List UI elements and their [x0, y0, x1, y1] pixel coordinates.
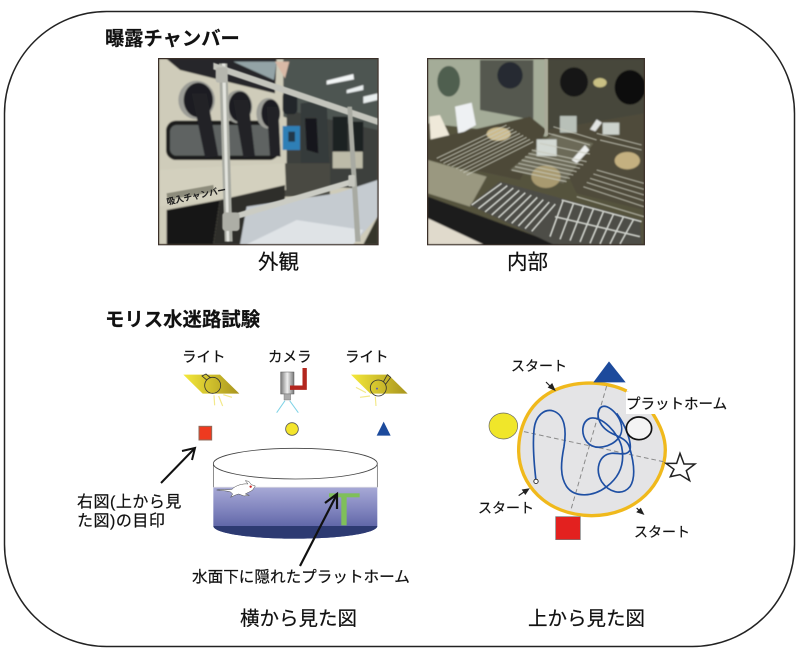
marker: yellow circle [489, 413, 518, 439]
marker: blue triangle [377, 422, 391, 436]
marker: star [666, 453, 695, 481]
platform circle [626, 417, 652, 440]
top view diagram [489, 361, 695, 540]
icon: camera [277, 368, 305, 413]
label on chamber: 吸入チャンバー [166, 185, 227, 207]
water tank [213, 448, 377, 539]
label: start left: スタート [478, 500, 534, 516]
photo: chamber interior [427, 58, 645, 245]
pool circle [518, 383, 666, 516]
marker: red square [556, 517, 580, 540]
marker: red square [199, 426, 212, 440]
swim path [533, 406, 634, 495]
marker: yellow circle [286, 423, 298, 435]
platform label background [626, 392, 730, 414]
photo: chamber exterior [158, 58, 379, 245]
marker: blue triangle [593, 361, 626, 382]
icon: right light [351, 375, 408, 406]
caption: interior: 内部 [507, 251, 548, 274]
label: light right: ライト [345, 350, 388, 366]
pool rim [519, 383, 665, 516]
label: light left: ライト [182, 350, 226, 366]
icon: left light [183, 374, 239, 406]
caption: exterior: 外観 [258, 251, 299, 274]
side view diagram [183, 368, 408, 539]
start point [534, 479, 538, 483]
caption: side view: 横から見た図 [240, 608, 357, 630]
caption: top view: 上から見た図 [528, 608, 645, 630]
label: platform: プラットホーム [626, 396, 727, 413]
label: hidden platform: 水面下に隠れたプラットホーム [192, 568, 410, 586]
label: marker note: 右図(上から見 [77, 493, 182, 511]
label: start top: スタート [511, 358, 567, 374]
heading: exposure chamber: 曝露チャンバー [105, 28, 240, 50]
arrow: to marker [161, 448, 195, 483]
axes [524, 386, 663, 511]
label: marker note: た図)の目印 [77, 512, 165, 530]
arrow: to platform [300, 494, 337, 566]
label: start bottom right: スタート [634, 524, 690, 540]
platform [329, 493, 360, 525]
label: camera: カメラ [268, 350, 312, 366]
start arrows [519, 382, 643, 514]
icon: mouse [217, 481, 255, 497]
heading: Morris water maze: モリス水迷路試験 [105, 309, 261, 331]
